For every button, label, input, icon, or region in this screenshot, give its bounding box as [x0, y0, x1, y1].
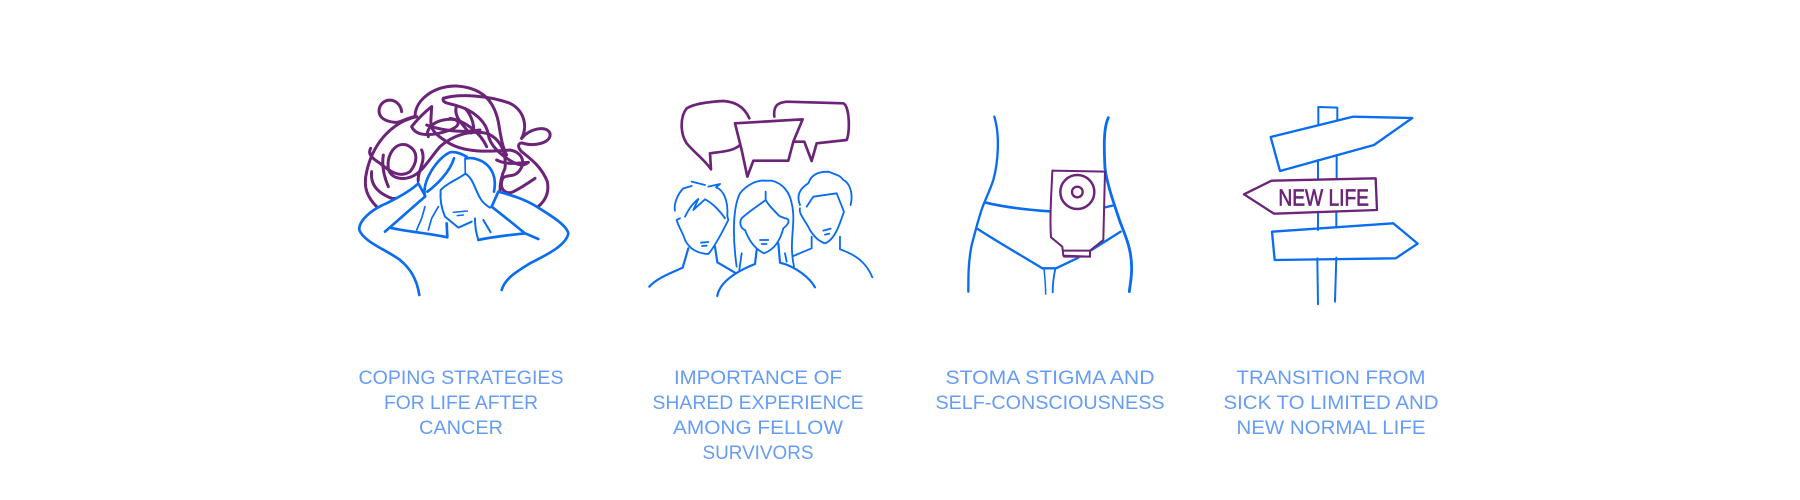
- caption: coping strategies: COPING STRATEGIES: [358, 368, 564, 389]
- caption: transition: SICK TO LIMITED AND: [1224, 393, 1438, 414]
- person line drawing: [359, 152, 568, 295]
- panel: stoma stigma: [936, 117, 1164, 414]
- panel: transition: [1224, 107, 1438, 439]
- person silhouette backing: [359, 152, 568, 290]
- caption: stoma stigma: [936, 368, 1164, 414]
- caption: coping strategies: FOR LIFE AFTER: [384, 393, 538, 414]
- caption: shared experience: SURVIVORS: [702, 443, 814, 464]
- icon: torso with stoma bag: [968, 117, 1132, 294]
- icon: three people with speech bubbles: [649, 101, 872, 296]
- caption: coping strategies: CANCER: [419, 418, 503, 439]
- stoma bag: [1050, 171, 1105, 257]
- caption: stoma stigma: SELF-CONSCIOUSNESS: [936, 393, 1164, 414]
- caption: transition: [1224, 368, 1438, 439]
- torso: [968, 117, 1132, 294]
- caption: transition: TRANSITION FROM: [1236, 368, 1426, 389]
- caption: shared experience: AMONG FELLOW: [673, 418, 843, 439]
- purple sign: new life: [1244, 178, 1377, 214]
- caption: stoma stigma: STOMA STIGMA AND: [946, 368, 1154, 389]
- caption: coping strategies: [358, 368, 564, 439]
- caption: shared experience: IMPORTANCE OF: [674, 368, 842, 389]
- icon: signpost: [1244, 107, 1418, 304]
- post and blue signs: [1271, 107, 1418, 304]
- caption: transition: NEW NORMAL LIFE: [1236, 418, 1426, 439]
- three people: [649, 172, 872, 296]
- tangled scribble: [365, 86, 550, 220]
- speech bubbles: [682, 101, 849, 177]
- caption: shared experience: [652, 368, 864, 464]
- sign label: NEW LIFE: [1278, 185, 1369, 211]
- caption: shared experience: SHARED EXPERIENCE: [652, 393, 864, 414]
- icon: overwhelmed person with tangled thoughts: [359, 86, 568, 295]
- panel: coping strategies: [358, 86, 568, 439]
- panel: shared experience: [649, 101, 872, 464]
